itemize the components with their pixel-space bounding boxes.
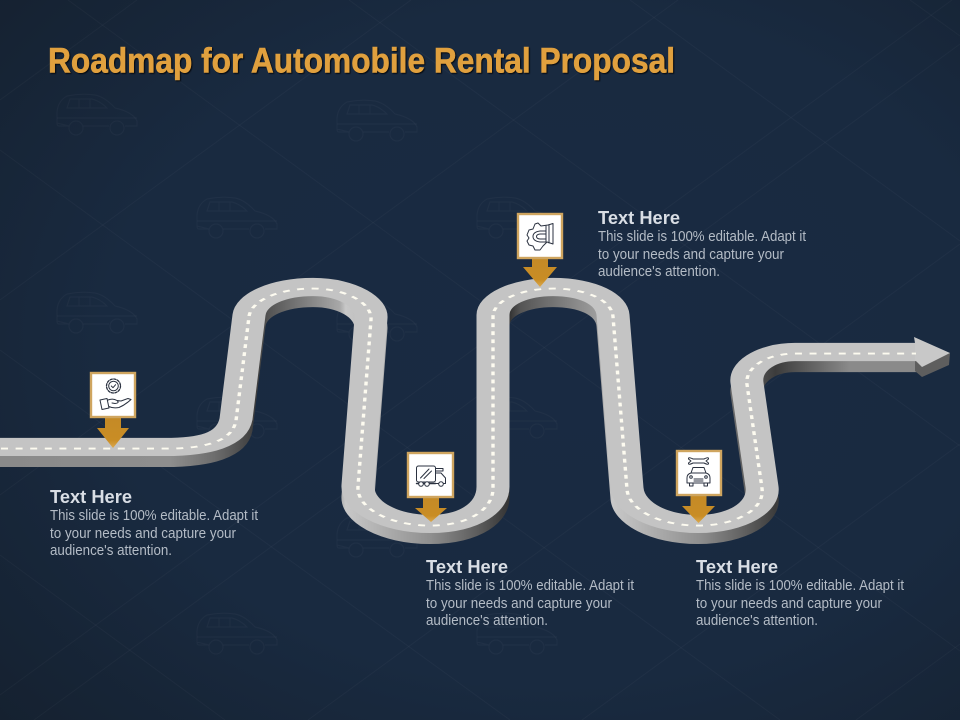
icon: car and wrench bbox=[687, 458, 710, 486]
marker 2 box bbox=[408, 453, 453, 497]
text block 2: Text Here bbox=[426, 556, 508, 577]
title: Roadmap for Automobile Rental Proposal bbox=[48, 42, 675, 80]
marker 4 arrow bbox=[682, 495, 715, 523]
icon: gear over open hand bbox=[100, 379, 131, 410]
text block 4: This slide is 100% editable. Adapt it bbox=[696, 577, 905, 594]
marker 3 box bbox=[518, 214, 562, 258]
text block 2: audience's attention. bbox=[426, 612, 548, 629]
text block 3: Text Here bbox=[598, 207, 680, 228]
text block 4: audience's attention. bbox=[696, 612, 818, 629]
text block 2: This slide is 100% editable. Adapt it bbox=[426, 577, 635, 594]
icon: gear and clamp bbox=[527, 223, 553, 250]
road surface bbox=[0, 287, 950, 524]
text block 4: Text Here bbox=[696, 556, 778, 577]
marker 4: car with wrench bbox=[677, 451, 721, 523]
marker 2: truck with tools bbox=[408, 453, 453, 522]
marker 3: gear with magnet bbox=[518, 214, 562, 287]
text block 3 bbox=[598, 207, 807, 280]
marker 2 arrow bbox=[415, 497, 447, 522]
text block 3: This slide is 100% editable. Adapt it bbox=[598, 228, 807, 245]
road: winding 3D roadway with arrow end bbox=[0, 287, 950, 535]
text block 3: audience's attention. bbox=[598, 263, 720, 280]
text block 2 bbox=[426, 556, 635, 629]
text block 2: to your needs and capture your bbox=[426, 595, 612, 612]
text block 1 bbox=[50, 486, 259, 559]
road centre dashes bbox=[1, 289, 916, 526]
text block 4 bbox=[696, 556, 905, 629]
text block 1: This slide is 100% editable. Adapt it bbox=[50, 507, 259, 524]
text block 1: to your needs and capture your bbox=[50, 525, 236, 542]
marker 1: hand with gear bbox=[91, 373, 135, 448]
background car watermarks bbox=[57, 94, 557, 654]
text block 1: Text Here bbox=[50, 486, 132, 507]
road side wall bbox=[0, 298, 950, 535]
text block 3: to your needs and capture your bbox=[598, 246, 784, 263]
marker 1 arrow bbox=[97, 417, 129, 448]
marker 3 arrow bbox=[523, 258, 557, 287]
marker 1 box bbox=[91, 373, 135, 417]
text block 1: audience's attention. bbox=[50, 542, 172, 559]
text block 4: to your needs and capture your bbox=[696, 595, 882, 612]
marker 4 box bbox=[677, 451, 721, 495]
icon: service truck bbox=[416, 466, 446, 486]
